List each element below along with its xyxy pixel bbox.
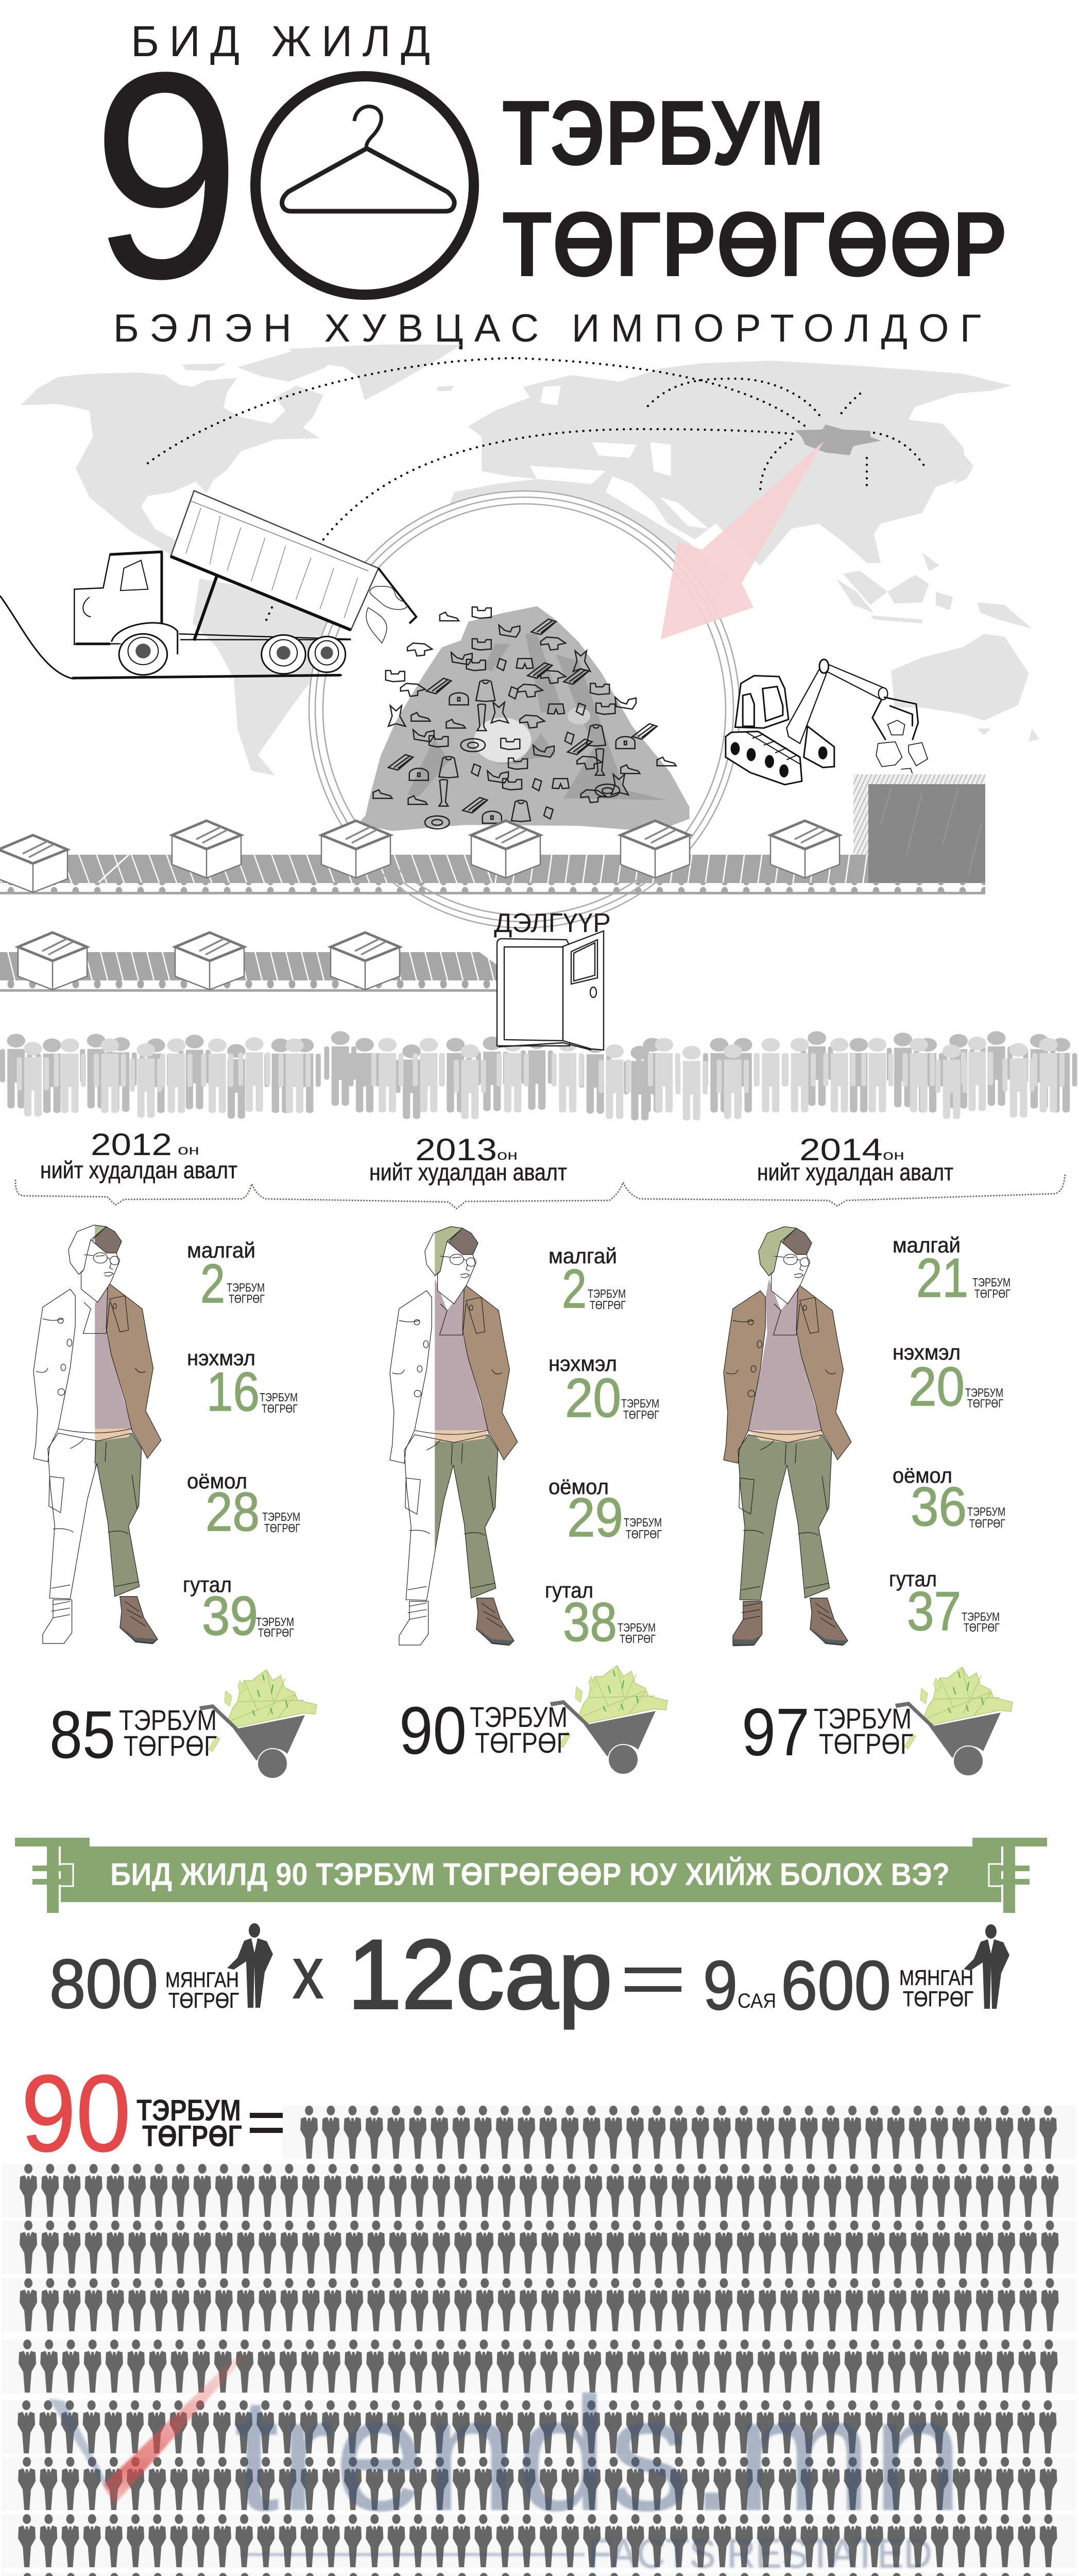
stats 2014 [889, 1233, 1011, 1642]
truck bed [170, 490, 379, 630]
shoes 2013: ТЭРБУМ [618, 1621, 656, 1634]
clothing 2012 [187, 1346, 298, 1422]
2013 heading: он [497, 1147, 518, 1163]
shoes 2014: 37 [907, 1580, 961, 1642]
ground line [0, 596, 342, 679]
sewn goods 2013: ТӨГРӨГ [626, 1528, 662, 1541]
hats 2012 [187, 1238, 265, 1314]
hats 2014 [893, 1233, 1011, 1309]
shoes 2013: гутал [545, 1578, 593, 1602]
shoes 2014: ТӨГРӨГ [964, 1621, 1000, 1634]
title: subtitle: БЭЛЭН ХУВЦАС ИМПОРТОЛДОГ [113, 307, 981, 350]
title block [92, 11, 1007, 350]
total 2014 with wheelbarrow: ТӨГРӨГ [819, 1727, 913, 1760]
shoes 2012: ТЭРБУМ [256, 1615, 294, 1629]
total 2012 with wheelbarrow: 85 [49, 1697, 115, 1772]
hats 2014: ТЭРБУМ [972, 1276, 1011, 1289]
clothing 2012: ТЭРБУМ [260, 1391, 298, 1404]
clothing 2014 [893, 1340, 1003, 1417]
shoes 2013: 38 [563, 1591, 617, 1653]
dump truck [0, 490, 416, 679]
2012 heading: он [178, 1142, 199, 1158]
result unit [899, 1965, 973, 2011]
clothing 2013: ТӨГРӨГ [623, 1408, 659, 1421]
hats 2012: ТӨГРӨГ [229, 1292, 265, 1306]
icon: man in suit [227, 1923, 273, 2008]
2014 heading: 2014 [799, 1132, 883, 1167]
hats 2013: ТЭРБУМ [588, 1287, 626, 1300]
sewn goods 2012: оёмол [187, 1469, 247, 1493]
multiply sign: x [293, 1932, 323, 2014]
crowd of shoppers [0, 1031, 1077, 1121]
2014 heading [757, 1132, 953, 1185]
sewn goods 2012: ТӨГРӨГ [264, 1521, 300, 1535]
2013 heading [369, 1132, 567, 1185]
clothing 2013: 20 [565, 1367, 621, 1429]
total 2012 with wheelbarrow: ТЭРБУМ [119, 1704, 217, 1736]
year headings [40, 1127, 953, 1185]
result million: САЯ [738, 1990, 776, 2012]
dotted brace across years [15, 1174, 1065, 1209]
equals sign [625, 1968, 681, 1992]
hats 2013: ТӨГРӨГ [590, 1298, 626, 1312]
figure 2012: mostly uncoloured [33, 1225, 161, 1645]
stats 2012 [183, 1238, 300, 1647]
falling clothes [366, 586, 407, 643]
total 2013 with wheelbarrow [399, 1666, 667, 1774]
clothing 2014: 20 [909, 1355, 965, 1417]
white circle interior [309, 491, 740, 928]
sewn goods 2014: оёмол [893, 1463, 952, 1487]
2012 heading: нийт худалдан авалт [40, 1157, 237, 1183]
figure 2014: fully coloured [724, 1227, 851, 1647]
boxes on upper belt [0, 821, 840, 892]
grid of employed people [2, 2106, 1076, 2576]
shoes 2012 [183, 1572, 294, 1647]
total 2013 with wheelbarrow: ТЭРБУМ [470, 1701, 568, 1733]
shoes 2014 [889, 1567, 1000, 1642]
clothing 2014: нэхмэл [893, 1340, 961, 1364]
sewn goods 2013: оёмол [549, 1475, 609, 1499]
sewn goods 2014: ТЭРБУМ [967, 1505, 1005, 1518]
salary unit: МЯНГАН [165, 1968, 239, 1992]
hats 2012: ТЭРБУМ [227, 1281, 265, 1294]
total 2012 with wheelbarrow [49, 1670, 317, 1778]
cab [74, 551, 162, 645]
twelve months: 12сар [348, 1920, 612, 2029]
total 2014 with wheelbarrow: ТЭРБУМ [814, 1702, 912, 1735]
clothing pile [358, 606, 690, 832]
boxes on lower belt [18, 933, 400, 990]
ring around pile [309, 491, 740, 928]
arrow: pink from Mongolia to pile [661, 441, 824, 639]
clothing 2014: ТЭРБУМ [965, 1386, 1003, 1399]
watermark check mark [48, 2354, 247, 2505]
banner text: БИД ЖИЛД 90 ТЭРБУМ ТӨГРӨГӨӨР ЮУ ХИЙЖ БОЛОХ ВЭ? [110, 1856, 950, 1892]
title: top line: БИД ЖИЛД [131, 17, 430, 65]
clothing 2012: нэхмэл [187, 1346, 255, 1370]
world map background [21, 344, 1039, 776]
watermark [48, 2354, 963, 2576]
clothing 2013: нэхмэл [549, 1351, 617, 1376]
salary unit [165, 1968, 239, 2012]
result million [703, 1946, 891, 2024]
salary equation [49, 1920, 1009, 2029]
clothing 2013 [549, 1351, 659, 1429]
total 2014 with wheelbarrow [742, 1667, 1013, 1776]
result million: 9 [703, 1946, 738, 2024]
clothing 2014: ТӨГРӨГ [967, 1397, 1003, 1410]
sewn goods 2014: ТӨГРӨГ [969, 1517, 1005, 1530]
result unit: МЯНГАН [899, 1965, 973, 1990]
stats 2013 [545, 1244, 662, 1653]
sewn goods 2013: ТЭРБУМ [624, 1516, 662, 1529]
shoes 2012: ТӨГРӨГ [258, 1626, 294, 1639]
2014 heading: он [883, 1147, 904, 1163]
2012 heading: 2012 [91, 1127, 172, 1162]
dotted trade routes [148, 358, 926, 623]
sewn goods 2013: 29 [567, 1486, 623, 1548]
hats 2014: ТӨГРӨГ [974, 1287, 1011, 1300]
2012 heading [40, 1127, 237, 1183]
crate [853, 774, 985, 883]
hats 2012: малгай [187, 1238, 255, 1262]
shoes 2013: ТӨГРӨГ [620, 1632, 656, 1646]
icon: left tugrik sign [15, 1838, 90, 1913]
shoes 2014: гутал [889, 1567, 937, 1591]
watermark name: trends.mn [234, 2363, 963, 2545]
big red ninety billion: ТӨГРӨГ [142, 2120, 242, 2153]
sewn goods 2013 [549, 1475, 662, 1548]
2014 heading: нийт худалдан авалт [757, 1159, 953, 1185]
shoes 2013 [545, 1578, 656, 1653]
conveyor belt: upper [0, 855, 985, 894]
2013 heading: 2013 [415, 1132, 497, 1167]
result million: 600 [781, 1946, 891, 2024]
total 2013 with wheelbarrow: ТӨГРӨГ [475, 1726, 570, 1759]
hats 2012: 2 [200, 1252, 225, 1314]
2013 heading: нийт худалдан авалт [369, 1159, 567, 1185]
sewn goods 2012: 28 [205, 1481, 260, 1543]
icon: right tugrik sign [972, 1838, 1047, 1913]
wheels [119, 634, 346, 675]
watermark tagline: FACTS RESTATED [588, 2531, 932, 2576]
clothing 2012: 16 [207, 1361, 260, 1422]
shoes 2012: 39 [202, 1585, 258, 1647]
hydraulic arm and chassis [194, 576, 217, 640]
title: big nine: 9 [92, 11, 241, 340]
icon: man in suit [964, 1924, 1009, 2009]
hats 2014: малгай [893, 1233, 961, 1257]
total 2013 with wheelbarrow: 90 [399, 1692, 467, 1768]
hats 2013: 2 [562, 1258, 587, 1319]
total 2014 with wheelbarrow: 97 [742, 1694, 810, 1770]
title: tugrik: ТӨГРӨГӨӨР [502, 193, 1007, 296]
sewn goods 2012 [187, 1469, 300, 1543]
hats 2013: малгай [549, 1244, 617, 1268]
shoes 2014: ТЭРБУМ [962, 1610, 1000, 1623]
sewn goods 2012: ТЭРБУМ [262, 1510, 300, 1523]
sewn goods 2014: 36 [911, 1476, 967, 1537]
title: billion: ТЭРБУМ [502, 81, 825, 185]
result unit: ТӨГРӨГ [903, 1987, 973, 2011]
big red ninety billion: ТЭРБУМ [136, 2094, 241, 2127]
icon: zero circle with coat hanger [255, 76, 474, 295]
sewn goods 2014 [893, 1463, 1005, 1537]
icon: open store door [497, 931, 604, 1050]
highlighted Mongolia [795, 425, 881, 455]
big red ninety billion [21, 2052, 286, 2174]
shoes 2012: гутал [183, 1572, 232, 1597]
excavator [726, 659, 928, 785]
salary amount: 800 [49, 1945, 158, 2023]
salary unit: ТӨГРӨГ [168, 1988, 239, 2012]
conveyor belt: lower [0, 933, 497, 992]
question banner [15, 1838, 1047, 1913]
figure 2013: partly coloured [390, 1227, 518, 1647]
store label: ДЭЛГҮҮР [494, 908, 611, 938]
hats 2014: 21 [916, 1247, 968, 1309]
clothing 2013: ТЭРБУМ [621, 1397, 659, 1410]
hats 2013 [549, 1244, 626, 1319]
clothing 2012: ТӨГРӨГ [262, 1402, 298, 1415]
total 2012 with wheelbarrow: ТӨГРӨГ [124, 1730, 217, 1762]
big red ninety billion: 90 [21, 2052, 131, 2174]
